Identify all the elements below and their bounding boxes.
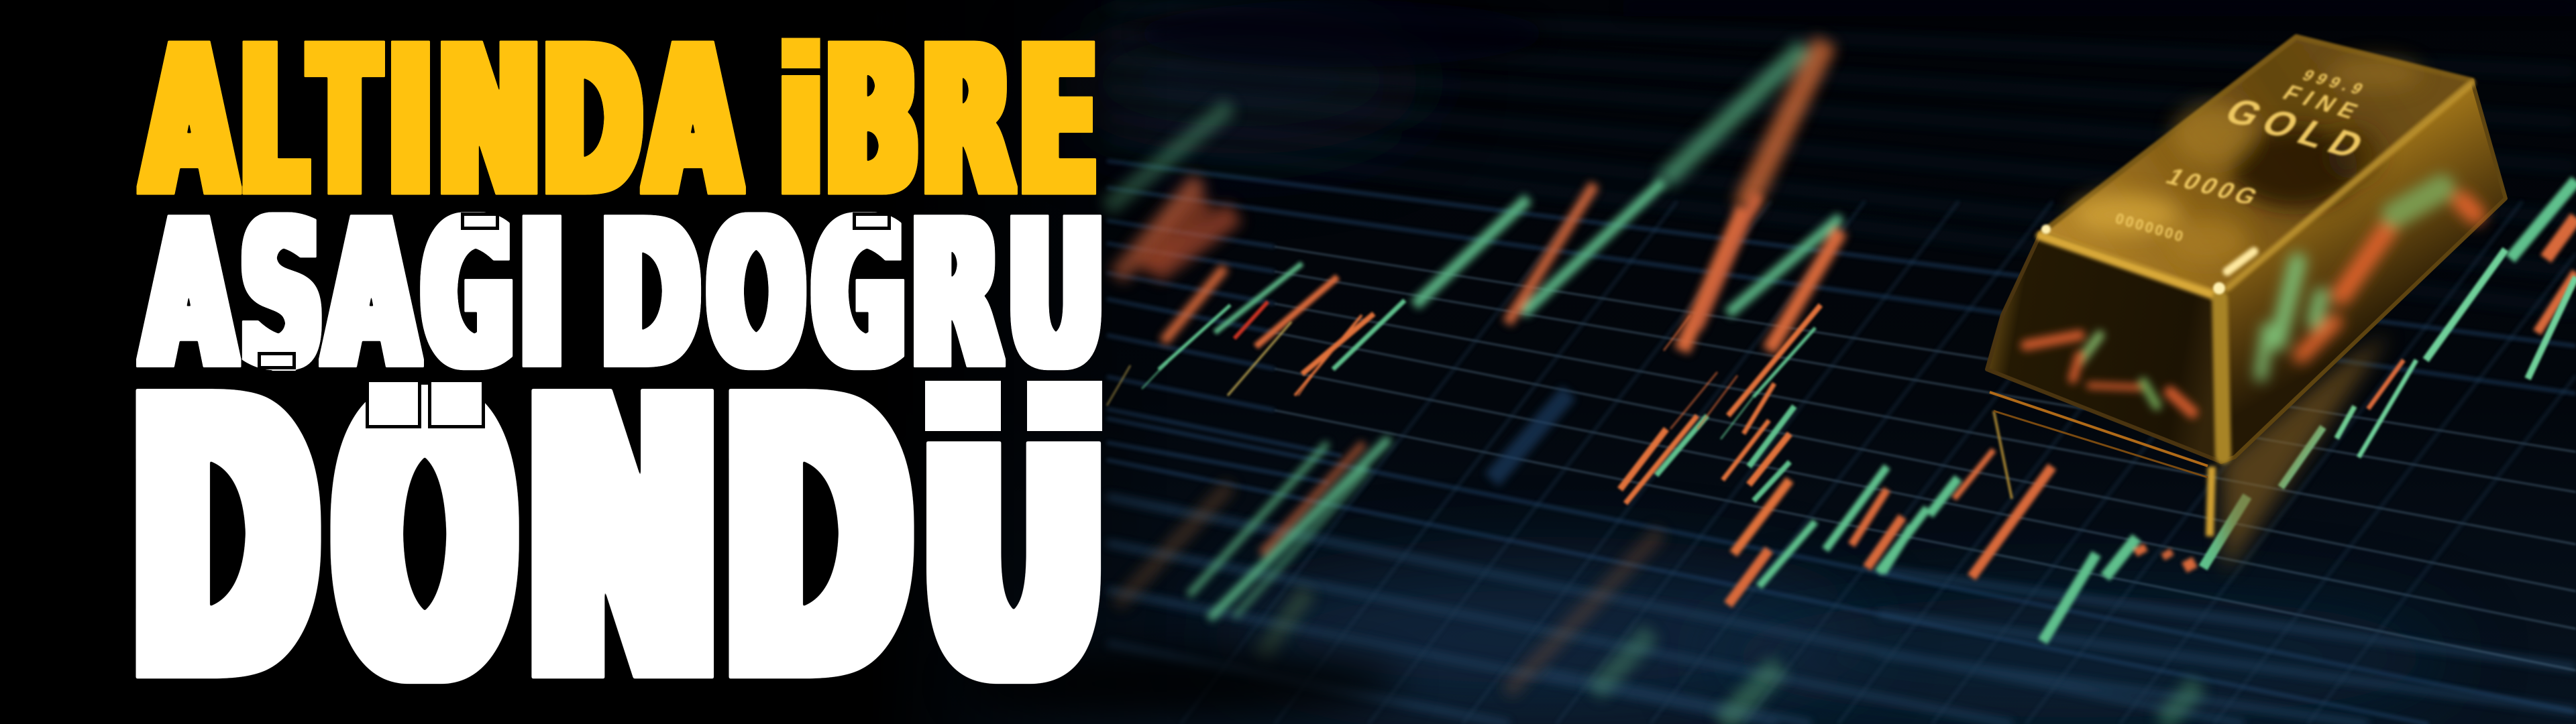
gold bar — [1987, 37, 2506, 572]
title line 2: AŞAĞI DOĞRU: O — [708, 179, 804, 411]
title line 1: ALTINDA İBRE: A — [647, 5, 739, 239]
right face — [2218, 80, 2506, 462]
title line 2: AŞAĞI DOĞRU: R — [911, 179, 1000, 411]
candle wicks — [1107, 315, 1754, 439]
near candles — [1215, 180, 2576, 642]
embossed bar text: 1000G — [2161, 163, 2267, 210]
title line 1: ALTINDA İBRE: T — [312, 5, 378, 239]
title line 1: ALTINDA İBRE: N — [437, 5, 541, 239]
chart grid lines — [1107, 5, 2576, 724]
base rim — [1990, 392, 2208, 477]
sharp candles — [1159, 249, 2576, 568]
embossed bar text: GOLD — [2216, 91, 2380, 168]
title line 2: AŞAĞI DOĞRU: I — [519, 179, 565, 411]
embossed bar text — [2114, 67, 2380, 245]
title line 1: ALTINDA İBRE: I — [388, 5, 433, 239]
title line 1: ALTINDA İBRE: B — [824, 5, 919, 239]
title lines 1 and 2 — [144, 5, 1104, 411]
title line 2: AŞAĞI DOĞRU: Ğ — [423, 179, 513, 411]
embossed bar text: FINE — [2277, 80, 2369, 125]
title line 1: ALTINDA İBRE: E — [1020, 5, 1096, 239]
top face lighting — [2073, 57, 2422, 265]
title line 2: AŞAĞI DOĞRU: D — [601, 179, 699, 411]
title line 2: AŞAĞI DOĞRU: A — [326, 179, 417, 411]
front face reflections — [2026, 335, 2192, 412]
embossed bar text: 0000000 — [2114, 210, 2187, 245]
title line 1: ALTINDA İBRE — [136, 38, 1096, 195]
top face — [2041, 37, 2472, 296]
title line 1: ALTINDA İBRE: İ — [779, 5, 823, 239]
mid blurred candles — [1163, 181, 1841, 619]
title line 2: AŞAĞI DOĞRU: A — [144, 179, 233, 411]
title line 1: ALTINDA İBRE: R — [922, 5, 1012, 239]
title line 1: ALTINDA İBRE: D — [543, 5, 641, 239]
title line 2: AŞAĞI DOĞRU — [136, 212, 1102, 371]
far blurred candles — [1107, 42, 2198, 724]
candlestick streaks — [1107, 42, 2576, 724]
embossed bar text: 999.9 — [2298, 67, 2371, 99]
title line 2: AŞAĞI DOĞRU: U — [1008, 179, 1104, 411]
title line 1: ALTINDA İBRE: L — [241, 5, 306, 239]
title line 2: AŞAĞI DOĞRU: Ş — [241, 179, 322, 411]
title line 1: ALTINDA İBRE: A — [144, 5, 234, 239]
floor reflection — [1994, 333, 2390, 572]
right face reflections — [2261, 188, 2475, 375]
title line 2: AŞAĞI DOĞRU: Ğ — [813, 179, 904, 411]
bar edges — [2041, 83, 2472, 456]
front face — [1987, 233, 2221, 462]
title line 3: DÖNDÜ — [131, 381, 1102, 693]
